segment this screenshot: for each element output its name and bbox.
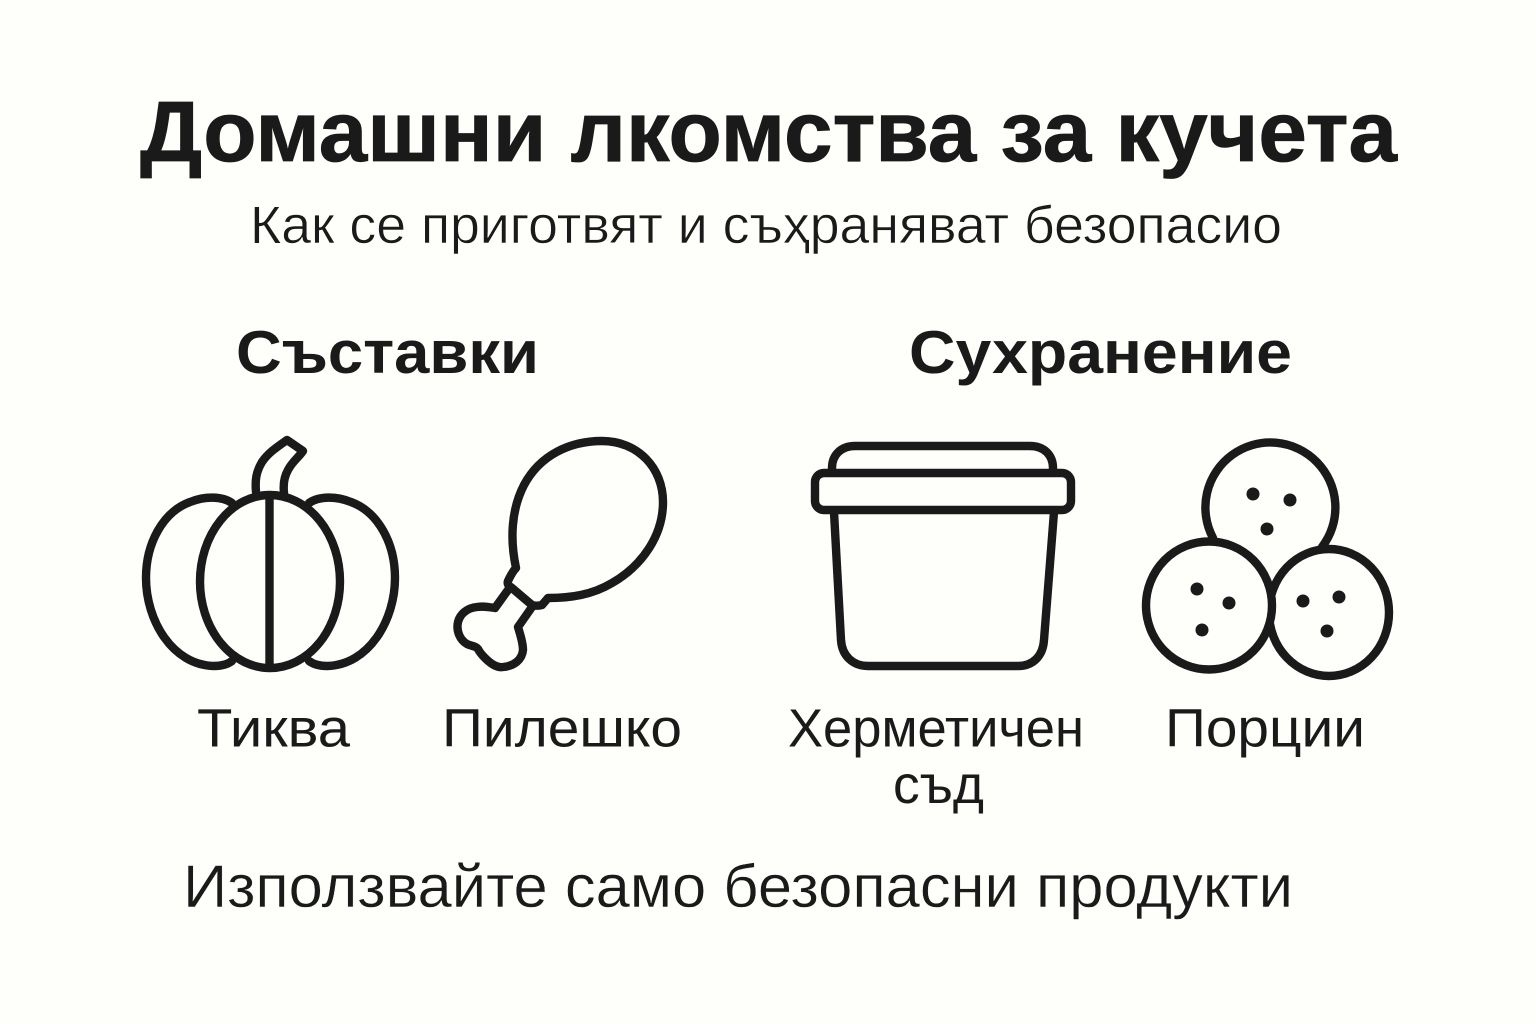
footer note: Използвайте само безопасни продукти (183, 853, 1293, 920)
label: container, second line: съд (893, 755, 984, 815)
panel: storage (788, 319, 1389, 815)
label: portions: Порции (1165, 698, 1365, 758)
heading: storage: Сухранение (909, 319, 1292, 386)
title: Домашни лкомства за кучета (140, 85, 1398, 180)
icon: airtight container (815, 446, 1071, 666)
panel: ingredients (146, 319, 682, 758)
label: pumpkin: Тиква (197, 698, 351, 758)
label: chicken: Пилешко (442, 698, 682, 758)
icon: pumpkin (146, 440, 395, 668)
icon: chicken drumstick (457, 441, 663, 667)
label: container: Херметичен (788, 698, 1084, 758)
subtitle: Как се приготвят и съҳраняват безопасио (250, 196, 1282, 255)
heading: ingredients: Съставки (236, 319, 539, 386)
icon: treat portions (1146, 442, 1389, 676)
